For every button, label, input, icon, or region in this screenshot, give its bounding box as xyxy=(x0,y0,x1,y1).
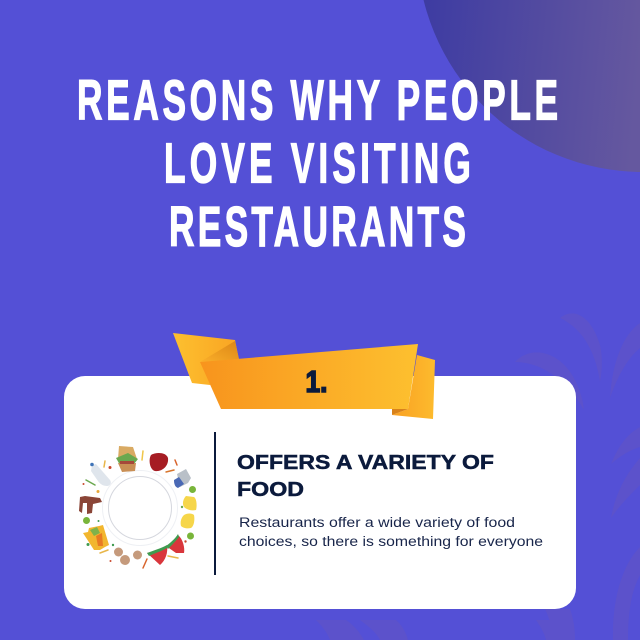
meatballs xyxy=(114,548,142,565)
title: REASONS WHY PEOPLE xyxy=(77,69,558,133)
plate xyxy=(102,470,178,546)
title: LOVE VISITING xyxy=(164,132,471,196)
heading: FOOD xyxy=(237,479,304,501)
body text: choices, so there is something for everyone xyxy=(239,534,543,549)
cans xyxy=(174,469,191,488)
chocolate xyxy=(79,496,102,514)
limes xyxy=(83,486,196,540)
panel: white card xyxy=(64,376,576,609)
ribbon left fold xyxy=(200,341,239,362)
ribbon banner xyxy=(173,333,435,419)
heading: OFFERS A VARIETY OF xyxy=(237,452,494,474)
number: 1. xyxy=(306,364,328,399)
ribbon right tail xyxy=(392,355,435,419)
ribbon main band xyxy=(200,344,418,409)
title: RESTAURANTS xyxy=(169,196,466,259)
heading xyxy=(237,452,494,501)
icon: ring of food around a plate xyxy=(79,446,197,568)
sandwich xyxy=(116,446,138,472)
ribbon left tail xyxy=(173,333,239,385)
apple xyxy=(150,453,168,471)
watermelon xyxy=(147,534,184,565)
ribbon right fold xyxy=(392,409,408,415)
carrots and peppers xyxy=(83,525,109,550)
body text: Restaurants offer a wide variety of food xyxy=(239,515,515,530)
divider line xyxy=(214,432,216,575)
body text xyxy=(239,515,543,549)
title xyxy=(77,69,558,259)
decorative corner circle xyxy=(417,0,640,172)
lemons xyxy=(181,496,197,528)
bottle xyxy=(90,463,111,486)
small food bits xyxy=(86,451,178,568)
faint palm leaves xyxy=(316,313,640,640)
